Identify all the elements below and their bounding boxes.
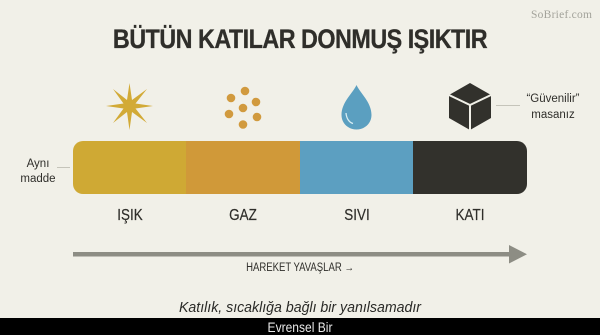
label: same matter: madde: [20, 173, 56, 185]
label: reliable table: “Güvenilir”: [526, 93, 580, 105]
segment: liquid: [300, 141, 413, 194]
connector: table: [496, 105, 520, 106]
label: light: IŞIK: [117, 207, 143, 224]
label: liquid: SIVI: [344, 207, 370, 224]
caption bar: [0, 318, 600, 335]
segment: gas: [186, 141, 300, 194]
label: solid: KATI: [456, 207, 484, 224]
arrow caption: HAREKET YAVAŞLAR →: [246, 262, 354, 274]
label: gas: GAZ: [229, 207, 257, 224]
label: same matter: [20, 158, 56, 185]
segment: light: [73, 141, 186, 194]
label: same matter: Aynı: [27, 158, 49, 170]
watermark: SoBrief.com: [531, 9, 592, 21]
connector: same matter: [57, 167, 70, 168]
label: reliable table: [526, 93, 580, 121]
state bar: [73, 141, 527, 194]
title: BÜTÜN KATILAR DONMUŞ IŞIKTIR: [113, 24, 487, 54]
caption text: Evrensel Bir: [268, 319, 332, 335]
label: reliable table: masanız: [531, 109, 575, 121]
segment: solid: [413, 141, 527, 194]
conclusion text: Katılık, sıcaklığa bağlı bir yanılsamadır: [179, 300, 421, 316]
